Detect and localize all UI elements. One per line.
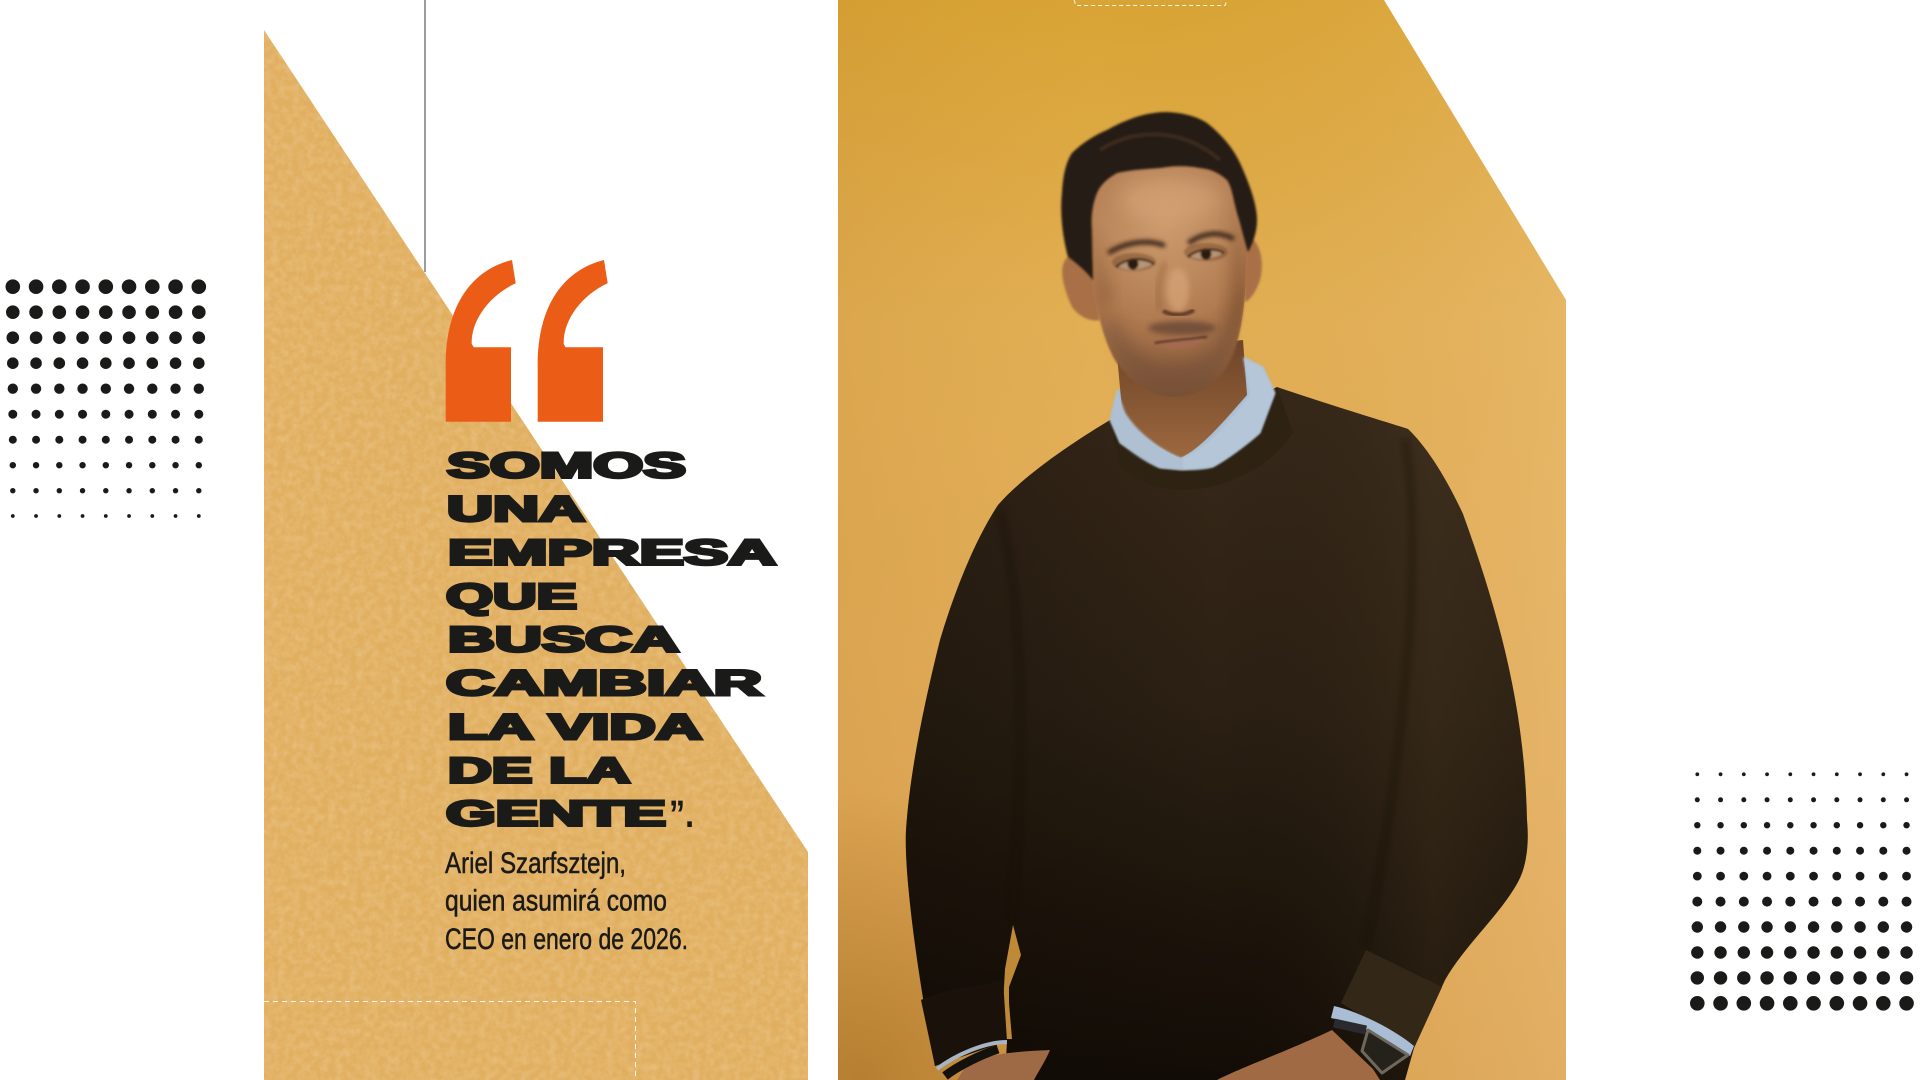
collar flap left [1110, 390, 1182, 470]
quote heading: EMPRESA [448, 534, 776, 572]
quote heading: LA VIDA [448, 708, 702, 747]
photo panel: portrait on gold background [838, 0, 1566, 1080]
quote heading: ”. [669, 794, 694, 836]
quote heading: UNA [447, 490, 585, 529]
eyebrows [1110, 234, 1232, 252]
attribution byline: Ariel Szarfsztejn, [445, 847, 626, 880]
gold backdrop [838, 0, 1566, 1080]
quote heading: SOMOS [447, 446, 686, 486]
right hand [1217, 1030, 1380, 1080]
hair [1061, 112, 1257, 280]
left shirt cuff and bracelet [937, 1042, 1007, 1076]
face [1091, 166, 1246, 378]
mouth [1155, 336, 1207, 349]
shirt collar [1110, 357, 1275, 470]
attribution byline [445, 847, 688, 956]
dot grid: right halftone [1697, 774, 1907, 1003]
nose [1158, 262, 1194, 315]
left cuff [921, 989, 1007, 1066]
gap between arm and torso [1003, 925, 1021, 1039]
tan triangular panel [264, 30, 808, 1080]
quote heading [446, 446, 776, 836]
facial shading and stubble [1092, 178, 1250, 400]
left hand [957, 1050, 1050, 1080]
quote heading: DE LA [448, 752, 630, 790]
attribution byline: CEO en enero de 2026. [445, 923, 688, 956]
eyes [1112, 243, 1228, 271]
orange quotation marks [446, 260, 608, 422]
vertical rule [424, 0, 426, 272]
neckline ribbing [1110, 387, 1293, 490]
dot grid: left halftone [13, 287, 199, 516]
right sleeve cuff [1341, 950, 1442, 1048]
dashed crop mark at top [1074, 0, 1227, 6]
attribution byline: quien asumirá como [445, 885, 667, 918]
right shirt cuff [1331, 1006, 1414, 1056]
quote heading: BUSCA [448, 620, 679, 660]
sweater [906, 387, 1528, 1080]
collar flap right [1182, 357, 1275, 470]
neck [1117, 340, 1247, 458]
dashed frame on tan panel [264, 1002, 636, 1080]
ears [1062, 237, 1262, 320]
person [906, 112, 1528, 1080]
quote heading: QUE [446, 578, 577, 616]
watch [1334, 1023, 1408, 1073]
quote heading: CAMBIAR [446, 664, 762, 703]
sleeve seams [1400, 442, 1414, 730]
quote heading: GENTE [446, 794, 666, 834]
